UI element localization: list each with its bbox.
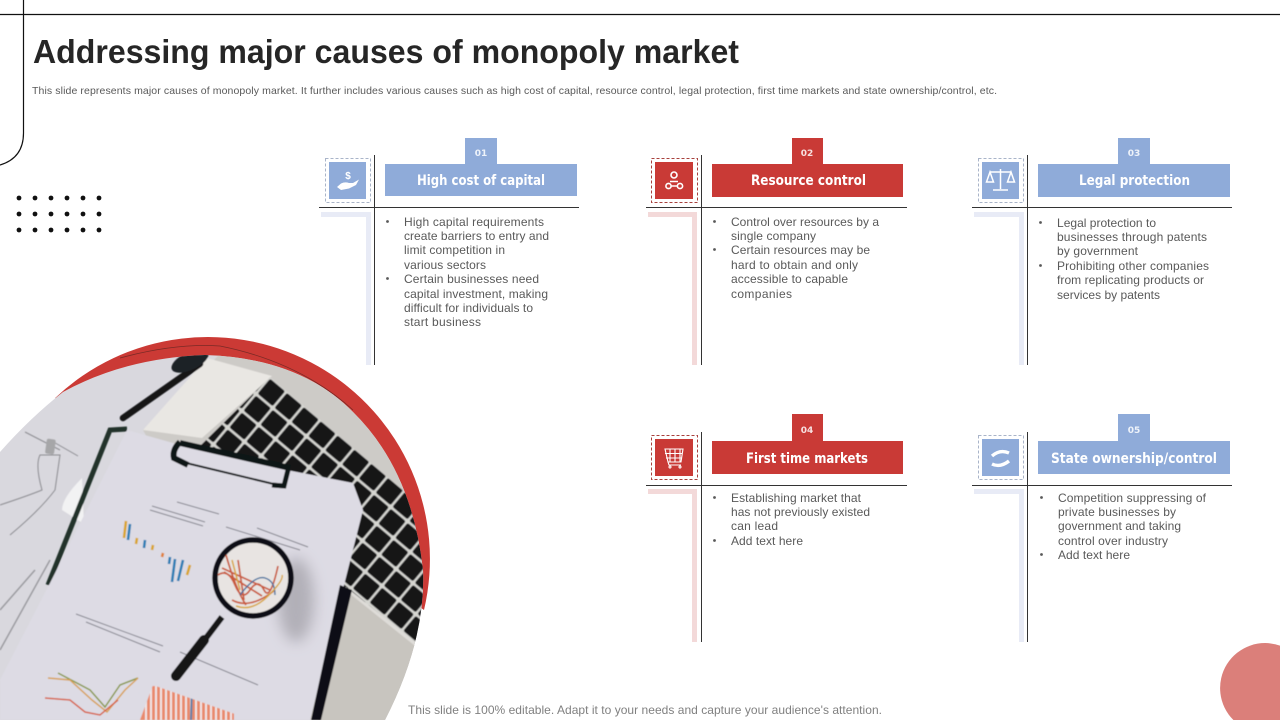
heading bar: First time markets	[712, 441, 903, 474]
number tab 04	[792, 414, 823, 442]
panel: first time markets	[646, 414, 907, 642]
bullet text: High capital requirements	[404, 215, 544, 229]
footer note: This slide is 100% editable. Adapt it to your needs and capture your audience's attention.	[408, 703, 882, 717]
bullet text: businesses through patents	[1057, 230, 1207, 244]
bullet text: Competition suppressing of	[1058, 491, 1207, 505]
bullet text: government and taking	[1058, 519, 1181, 533]
number tab 05	[1118, 414, 1150, 442]
heading bar: Legal protection	[1038, 164, 1230, 197]
thin arc on red crescent	[120, 346, 353, 410]
bullet text: various sectors	[404, 258, 486, 272]
bullet text: by government	[1057, 244, 1139, 258]
number tab 02	[792, 138, 823, 165]
top rule and corner frame	[0, 0, 1280, 165]
bullet text: companies	[731, 287, 792, 301]
photo: laptop, clipboard and magnifier over charts	[0, 340, 440, 720]
panel: state ownership/control	[972, 414, 1232, 642]
bullet text: Add text here	[1058, 548, 1130, 562]
bullet text: start business	[404, 315, 481, 329]
bullet text: Legal protection to	[1057, 216, 1156, 230]
number tab 05: 05	[1128, 426, 1140, 436]
bullet text: from replicating products or	[1057, 273, 1204, 287]
heading bar: Resource control: Resource control	[751, 173, 866, 189]
bullet text: create barriers to entry and	[404, 229, 549, 243]
number tab 03	[1118, 138, 1150, 165]
bullet text: Establishing market that	[731, 491, 862, 505]
title: Addressing major causes of monopoly market	[33, 34, 739, 71]
bullet text: has not previously existed	[731, 505, 870, 519]
heading bar: Resource control	[712, 164, 903, 197]
decorative pink circle	[1220, 643, 1280, 720]
heading bar: State ownership/control	[1038, 441, 1230, 474]
number tab 04: 04	[801, 426, 813, 436]
bullet text	[1040, 491, 1207, 562]
bullet text	[713, 215, 879, 301]
red crescent behind photo	[55, 337, 430, 610]
heading bar: Legal protection: Legal protection	[1079, 173, 1190, 189]
panel: legal protection	[972, 138, 1232, 365]
bullet text: limit competition in	[404, 243, 505, 257]
bullet text: private businesses by	[1058, 505, 1176, 519]
bullet text: hard to obtain and only	[731, 258, 858, 272]
bullet text	[713, 491, 870, 548]
bullet text: Add text here	[731, 534, 803, 548]
icon: connected people	[652, 158, 698, 202]
bullet text: Prohibiting other companies	[1057, 259, 1209, 273]
bullet text: control over industry	[1058, 534, 1168, 548]
heading bar: High cost of capital: High cost of capital	[417, 173, 545, 189]
number tab 02: 02	[801, 149, 813, 159]
bullet text: services by patents	[1057, 288, 1160, 302]
icon: hand holding dollar: $	[345, 171, 351, 182]
bullet text: can lead	[731, 519, 778, 533]
bullet text: accessible to capable	[731, 272, 848, 286]
heading bar: High cost of capital	[385, 164, 577, 196]
subtitle: This slide represents major causes of monopoly market. It further includes various causes such as high cost of capital, resource control, legal protection, first time markets and state ownership/control, etc.	[32, 85, 997, 97]
bullet text	[386, 215, 549, 329]
icon: exchanging hands	[978, 436, 1024, 480]
number tab 01: 01	[475, 149, 487, 159]
panel: resource control	[646, 138, 907, 365]
bullet text: difficult for individuals to	[404, 301, 533, 315]
bullet text: Certain businesses need	[404, 272, 539, 286]
bullet text: single company	[731, 229, 816, 243]
icon: balance scales	[978, 158, 1024, 202]
bullet text	[1039, 216, 1209, 302]
bullet text: Control over resources by a	[731, 215, 879, 229]
icon: hand holding dollar	[326, 158, 370, 202]
decorative dot grid	[17, 196, 101, 232]
heading bar: First time markets: First time markets	[746, 451, 868, 467]
number tab 01	[465, 138, 497, 165]
number tab 03: 03	[1128, 149, 1140, 159]
bullet text: capital investment, making	[404, 287, 548, 301]
icon: shopping cart	[652, 436, 698, 480]
heading bar: State ownership/control: State ownership/control	[1051, 451, 1217, 467]
panel: high cost of capital	[319, 138, 579, 365]
bullet text: Certain resources may be	[731, 243, 870, 257]
